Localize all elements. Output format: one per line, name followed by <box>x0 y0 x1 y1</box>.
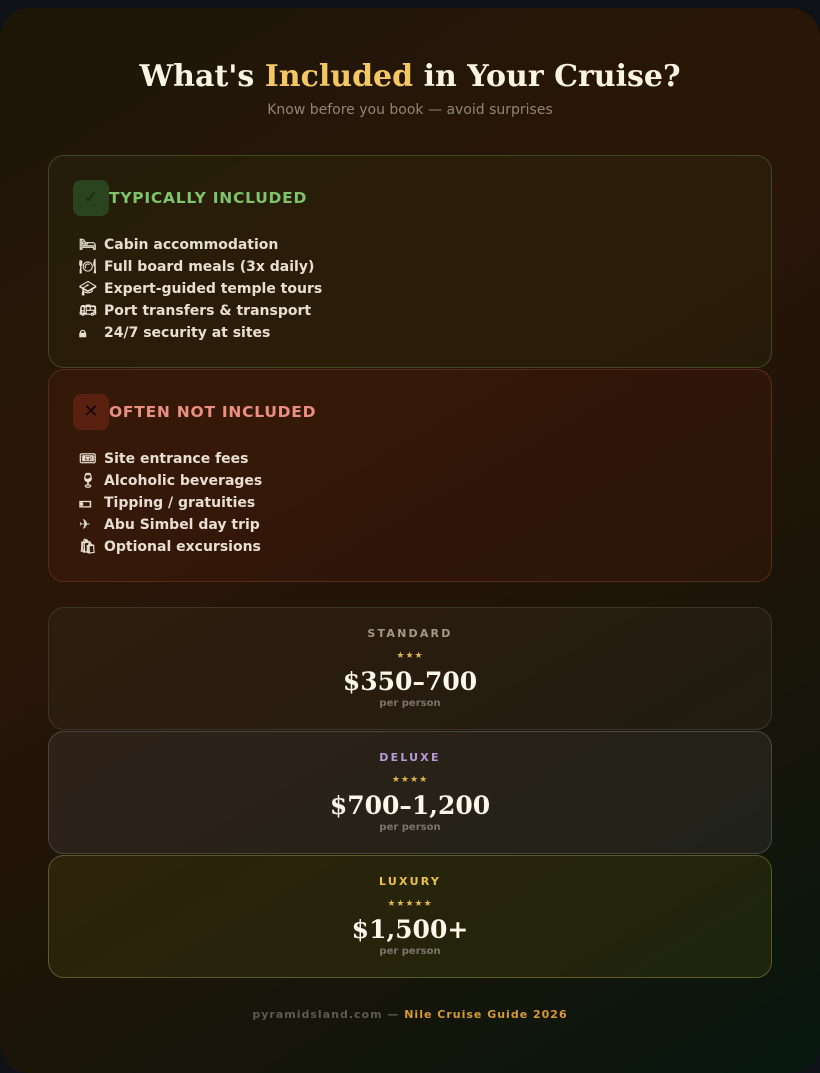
list: included items: 🎓︎ <box>79 281 97 297</box>
heading: included: TYPICALLY INCLUDED <box>109 189 307 207</box>
list: excluded items: Abu Simbel day trip <box>104 517 260 533</box>
list: excluded items <box>79 451 262 555</box>
list: included items: 24/7 security at sites <box>104 325 270 341</box>
price card: standard: STANDARD <box>367 627 453 640</box>
list: included items: Expert-guided temple tours <box>104 281 322 297</box>
list: included items: Port transfers & transport <box>104 303 311 319</box>
heading: not included: OFTEN NOT INCLUDED <box>109 403 316 421</box>
price card: luxury <box>48 855 772 978</box>
price card: standard: per person <box>379 698 441 709</box>
panel: included <box>48 155 772 368</box>
list: included items: Full board meals (3x daily) <box>104 259 314 275</box>
icon: cross: ✕ <box>83 401 99 422</box>
list: excluded items: ✈︎ <box>79 517 91 533</box>
list: included items: 🛏︎ <box>79 237 97 253</box>
price card: deluxe <box>48 731 772 854</box>
title: What's Included in Your Cruise? <box>139 59 681 94</box>
price card: luxury: per person <box>379 946 441 957</box>
footer: pyramidsland.com — Nile Cruise Guide 2026 <box>252 1008 568 1021</box>
price card: luxury: LUXURY <box>379 875 441 888</box>
subtitle: Know before you book — avoid surprises <box>267 102 553 118</box>
list: excluded items: Tipping / gratuities <box>104 495 255 511</box>
list: excluded items: 🎟︎ <box>79 451 97 467</box>
list: included items: 🚌︎ <box>79 303 97 319</box>
list: included items: 🍽︎ <box>79 259 97 275</box>
price card: deluxe: per person <box>379 822 441 833</box>
list: excluded items: Alcoholic beverages <box>104 473 262 489</box>
icon: check <box>73 180 109 216</box>
price card: deluxe: $700–1,200 <box>330 791 490 820</box>
list: included items: Cabin accommodation <box>104 237 278 253</box>
icon: cross <box>73 394 109 430</box>
price card: standard <box>48 607 772 730</box>
list: excluded items: 🛍︎ <box>79 539 97 555</box>
list: excluded items: Site entrance fees <box>104 451 248 467</box>
icon: check: ✓ <box>83 187 99 208</box>
list: excluded items: Optional excursions <box>104 539 261 555</box>
list: excluded items: 🍷︎ <box>79 473 97 489</box>
price card: deluxe: ★★★★ <box>392 775 428 785</box>
price card: luxury: $1,500+ <box>352 915 468 944</box>
list: included items <box>79 237 322 341</box>
price card: luxury: ★★★★★ <box>387 899 433 909</box>
price card: standard: ★★★ <box>396 651 424 661</box>
list: included items: 🔒︎ <box>79 325 86 341</box>
price card: standard: $350–700 <box>343 667 477 696</box>
panel: not included <box>48 369 772 582</box>
price card: deluxe: DELUXE <box>379 751 441 764</box>
list: excluded items: 💵︎ <box>79 495 92 511</box>
